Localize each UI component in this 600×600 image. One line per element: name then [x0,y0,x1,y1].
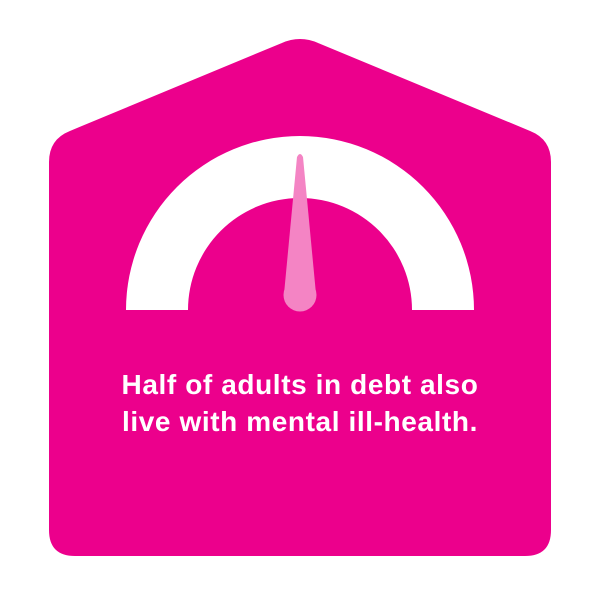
house background [50,40,550,555]
gauge arc [126,136,474,310]
gauge needle [284,154,316,312]
headline text [122,369,478,437]
headline text: Half of adults in debt also [122,369,478,400]
headline text: live with mental ill-health. [122,406,478,437]
